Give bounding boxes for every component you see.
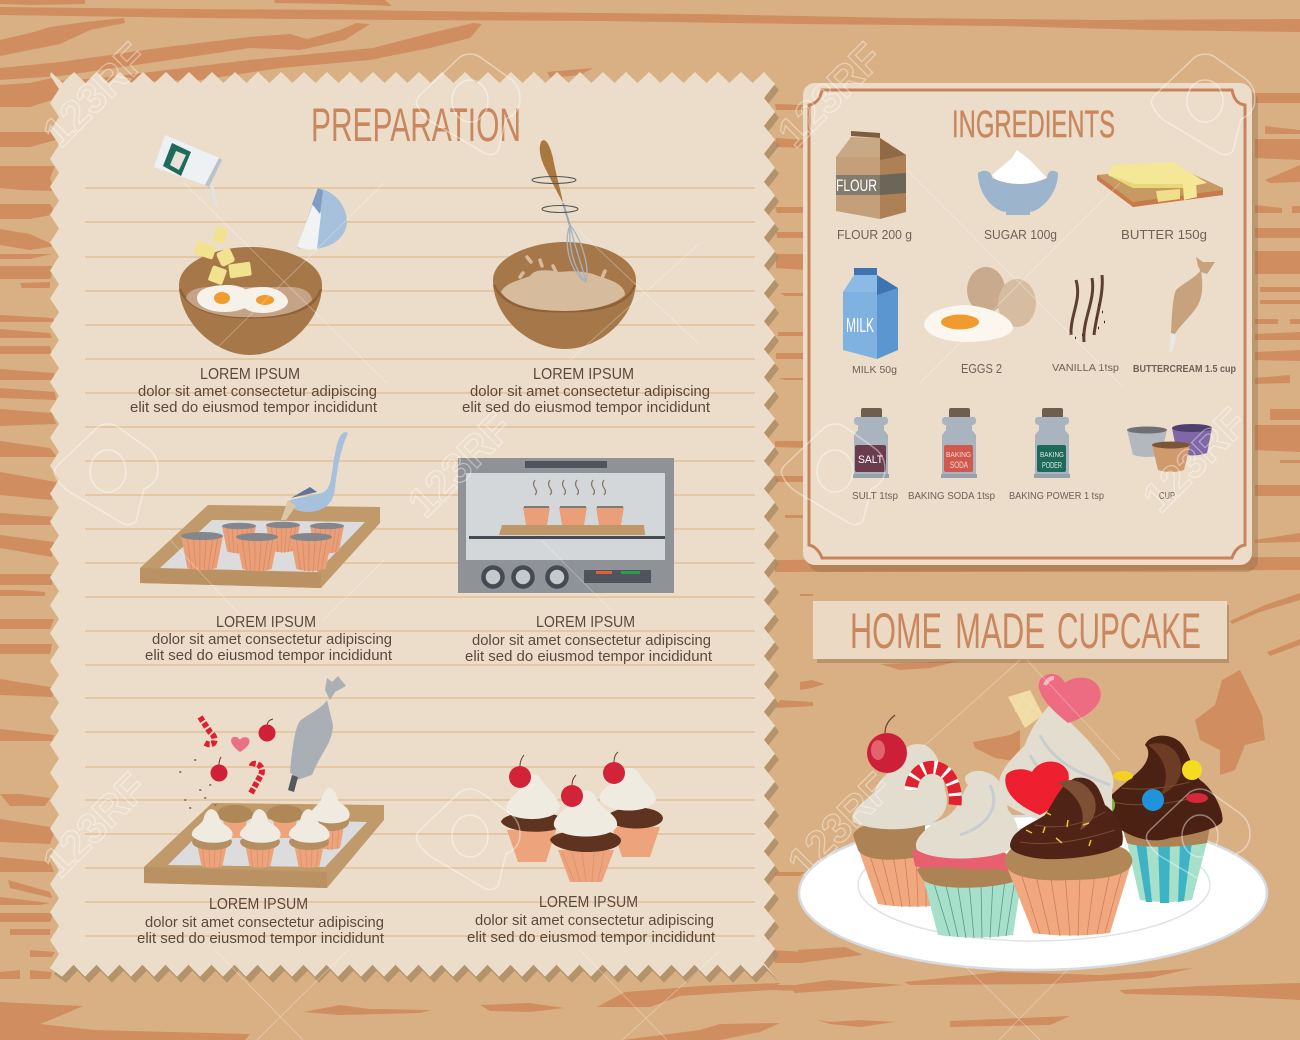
title: preparation: PREPARATION — [311, 98, 521, 151]
icon: eggs — [924, 267, 1036, 342]
caption 5: dolor sit amet consectetur adipiscing — [145, 914, 384, 931]
caption 3 — [145, 614, 393, 664]
caption 1 — [130, 366, 378, 416]
caption 6: LOREM IPSUM — [539, 894, 638, 911]
caption 5: LOREM IPSUM — [209, 896, 308, 913]
icon: bowl with batter — [493, 242, 636, 349]
icon: three cherry cupcakes — [501, 752, 663, 882]
watermarks: 123RF — [1134, 399, 1256, 521]
heading text: HOME — [850, 603, 942, 659]
cupcake: tall cream with pink heart — [999, 674, 1114, 824]
red heart topping — [1005, 762, 1069, 815]
caption 2: elit sed do eiusmod tempor incididunt — [462, 399, 711, 416]
cupcake: left orange with cherry — [852, 715, 947, 907]
label: butter: BUTTER 150g — [1121, 228, 1207, 242]
label: vanilla: VANILLA 1tsp — [1052, 362, 1119, 374]
caption 1: dolor sit amet consectetur adipiscing — [138, 383, 377, 400]
labels: jars: BAKING POWER 1 tsp — [1009, 490, 1104, 502]
step 2: whisking batter — [462, 140, 711, 416]
caption 2: dolor sit amet consectetur adipiscing — [470, 383, 710, 400]
icon: flour carton — [836, 131, 906, 219]
icon: ladle — [281, 432, 348, 520]
caption 2: LOREM IPSUM — [533, 366, 634, 383]
icon: baking soda jar: BAKING — [946, 452, 971, 459]
icon: tray with cupcakes — [144, 788, 384, 888]
icon: butter cubes — [193, 227, 252, 285]
icon: six paper cups — [181, 522, 344, 572]
icon: baking powder jar — [1034, 408, 1070, 478]
icon: flour carton: FLOUR — [836, 176, 877, 195]
label: sugar: SUGAR 100g — [984, 228, 1057, 242]
caption 4: elit sed do eiusmod tempor incididunt — [465, 648, 713, 665]
icon: paper cups — [1127, 424, 1212, 472]
caption 6: elit sed do eiusmod tempor incididunt — [467, 929, 716, 946]
icon: salt shaker — [154, 135, 222, 205]
labels: jars: BAKING SODA 1tsp — [908, 490, 995, 502]
label: buttercream: BUTTERCREAM 1.5 cup — [1133, 363, 1236, 375]
label: eggs: EGGS 2 — [961, 362, 1002, 376]
icon: buttercream bag — [1169, 257, 1215, 353]
icon: blue milk bowl — [296, 188, 347, 280]
labels: jars: SULT 1tsp — [852, 490, 898, 502]
paper shadow — [54, 78, 779, 983]
label: milk: MILK 50g — [852, 364, 897, 376]
icon: baking soda jar — [941, 408, 977, 478]
caption 4 — [465, 614, 713, 665]
labels: jars — [852, 490, 1104, 502]
caption 4: LOREM IPSUM — [536, 614, 635, 631]
icon: tray — [140, 505, 380, 588]
icon: baking soda jar: SODA — [950, 460, 968, 470]
icon: toppings — [180, 717, 276, 808]
cupcake: right chocolate with candies — [1095, 736, 1223, 903]
icon: baking powder jar: BAKING — [1040, 452, 1064, 459]
caption 3: LOREM IPSUM — [216, 614, 316, 631]
icon: sugar bowl — [978, 150, 1058, 215]
candy cane topping — [911, 767, 955, 805]
icon: milk carton: MILK — [846, 315, 874, 337]
step 5: decorating — [137, 676, 385, 947]
panel: ingredients card — [803, 83, 1258, 572]
watermarks: 123RF — [399, 404, 521, 526]
caption 3: elit sed do eiusmod tempor incididunt — [145, 647, 393, 664]
caption 1: elit sed do eiusmod tempor incididunt — [130, 399, 378, 416]
watermarks: 123RF — [34, 34, 156, 156]
caption 6: dolor sit amet consectetur adipiscing — [475, 912, 714, 929]
heading text: MADE — [955, 603, 1045, 659]
caption 1: LOREM IPSUM — [200, 366, 300, 383]
label: flour: FLOUR 200 g — [837, 228, 912, 242]
icon: brown bowl with eggs — [179, 247, 322, 355]
plate — [799, 816, 1267, 970]
icon: butter on board — [1097, 162, 1223, 207]
watermarks: 123RF — [779, 764, 901, 886]
icon: salt jar: SALT — [858, 454, 883, 466]
watermarks: 123RF — [34, 764, 156, 886]
step 4: oven — [458, 458, 713, 665]
caption 3: dolor sit amet consectetur adipiscing — [152, 631, 392, 648]
step 6: finished cupcakes — [467, 752, 716, 946]
icon: vanilla pods — [1071, 275, 1105, 342]
panel: preparation paper — [50, 72, 775, 977]
caption 5: elit sed do eiusmod tempor incididunt — [137, 930, 385, 947]
cupcake: front chocolate with sprinkles — [1005, 778, 1132, 936]
caption 4: dolor sit amet consectetur adipiscing — [472, 632, 711, 649]
heading text — [850, 603, 1201, 659]
icon: oven — [458, 458, 674, 593]
step 1: mixing ingredients in bowl — [130, 135, 378, 416]
illustration: plate of cupcakes — [799, 674, 1267, 970]
label: cup: CUP — [1159, 490, 1175, 502]
step 3: filling cups in tray — [140, 432, 393, 664]
icon: milk carton — [843, 268, 898, 359]
icon: whisk — [532, 140, 587, 282]
title: ingredients: INGREDIENTS — [952, 104, 1115, 146]
cupcake: mint with pink frosting — [912, 771, 1022, 938]
caption 5 — [137, 896, 385, 947]
icon: grey piping bag — [288, 676, 346, 792]
icon: salt jar — [853, 408, 889, 478]
heading text: CUPCAKE — [1057, 603, 1201, 659]
caption 6 — [467, 894, 716, 946]
banner: home made cupcake — [813, 601, 1229, 663]
watermarks: 123RF — [769, 34, 891, 156]
icon: baking powder jar: PODER — [1042, 460, 1062, 470]
caption 2 — [462, 366, 711, 416]
